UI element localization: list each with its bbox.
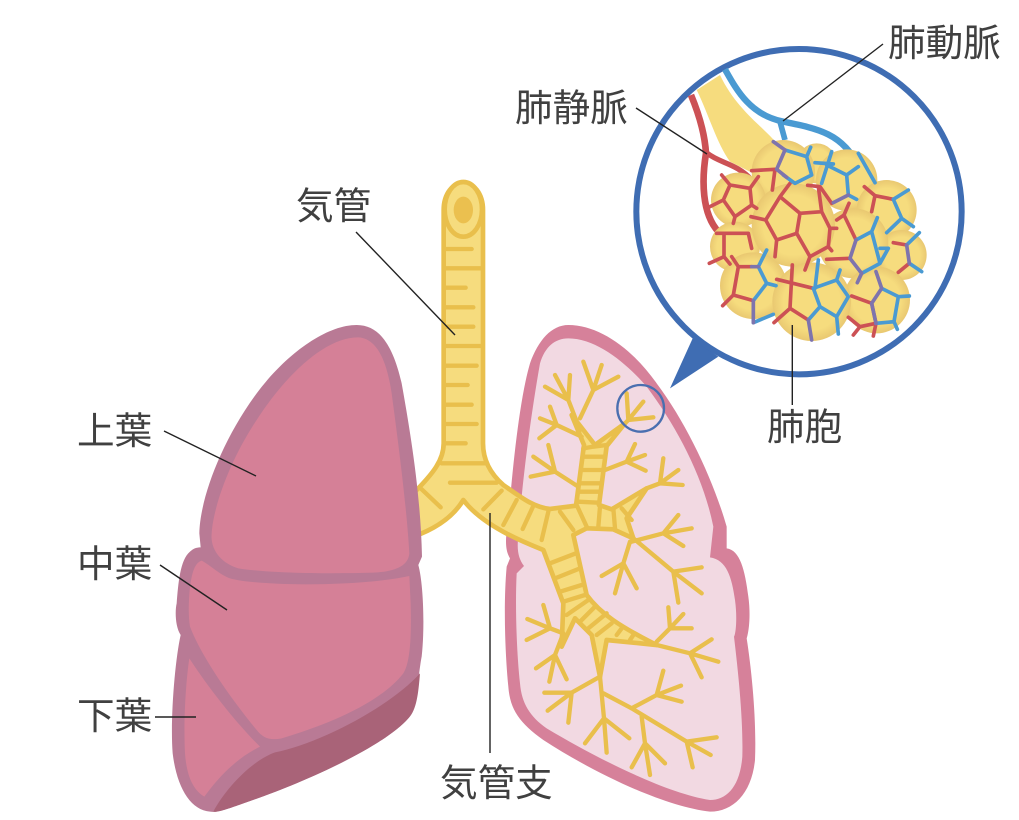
left lung silhouette (172, 325, 423, 812)
label: bronchus: 気管支 (440, 762, 553, 804)
label: pulmonary vein: 肺静脈 (515, 87, 628, 129)
upper lobe (212, 337, 409, 573)
red capillaries (709, 169, 909, 336)
alveoli cluster (710, 140, 927, 341)
leader lines (155, 44, 883, 753)
callout pointer (670, 338, 718, 388)
label: middle lobe: 中葉 (77, 543, 152, 585)
label: pulmonary artery: 肺動脈 (888, 22, 1001, 64)
magnified-area marker circle (617, 385, 664, 432)
pulmonary vein (691, 95, 752, 232)
middle lobe (189, 561, 411, 739)
lung underside shadow (213, 673, 420, 812)
label: alveolus: 肺胞 (767, 406, 842, 448)
lower lobe (184, 658, 260, 797)
purple capillary transitions (752, 142, 909, 340)
terminal bronchiole (697, 75, 777, 173)
left lung exterior (172, 325, 423, 812)
label: trachea: 気管 (296, 185, 371, 227)
magnified alveoli inset (636, 49, 962, 388)
right lung outer wall (505, 325, 755, 812)
label: upper lobe: 上葉 (77, 410, 152, 452)
trachea and main bronchi (413, 183, 657, 677)
bronchioles (527, 362, 718, 775)
right lung interior (516, 338, 742, 800)
pulmonary artery (725, 69, 858, 167)
trachea cartilage rings (421, 249, 548, 540)
bronchus rings (550, 445, 633, 640)
blue capillaries (753, 147, 922, 334)
right lung cross-section with bronchial tree and trachea (413, 182, 755, 812)
trachea opening (445, 182, 482, 237)
label: lower lobe: 下葉 (77, 695, 152, 737)
inset circle (636, 49, 962, 374)
